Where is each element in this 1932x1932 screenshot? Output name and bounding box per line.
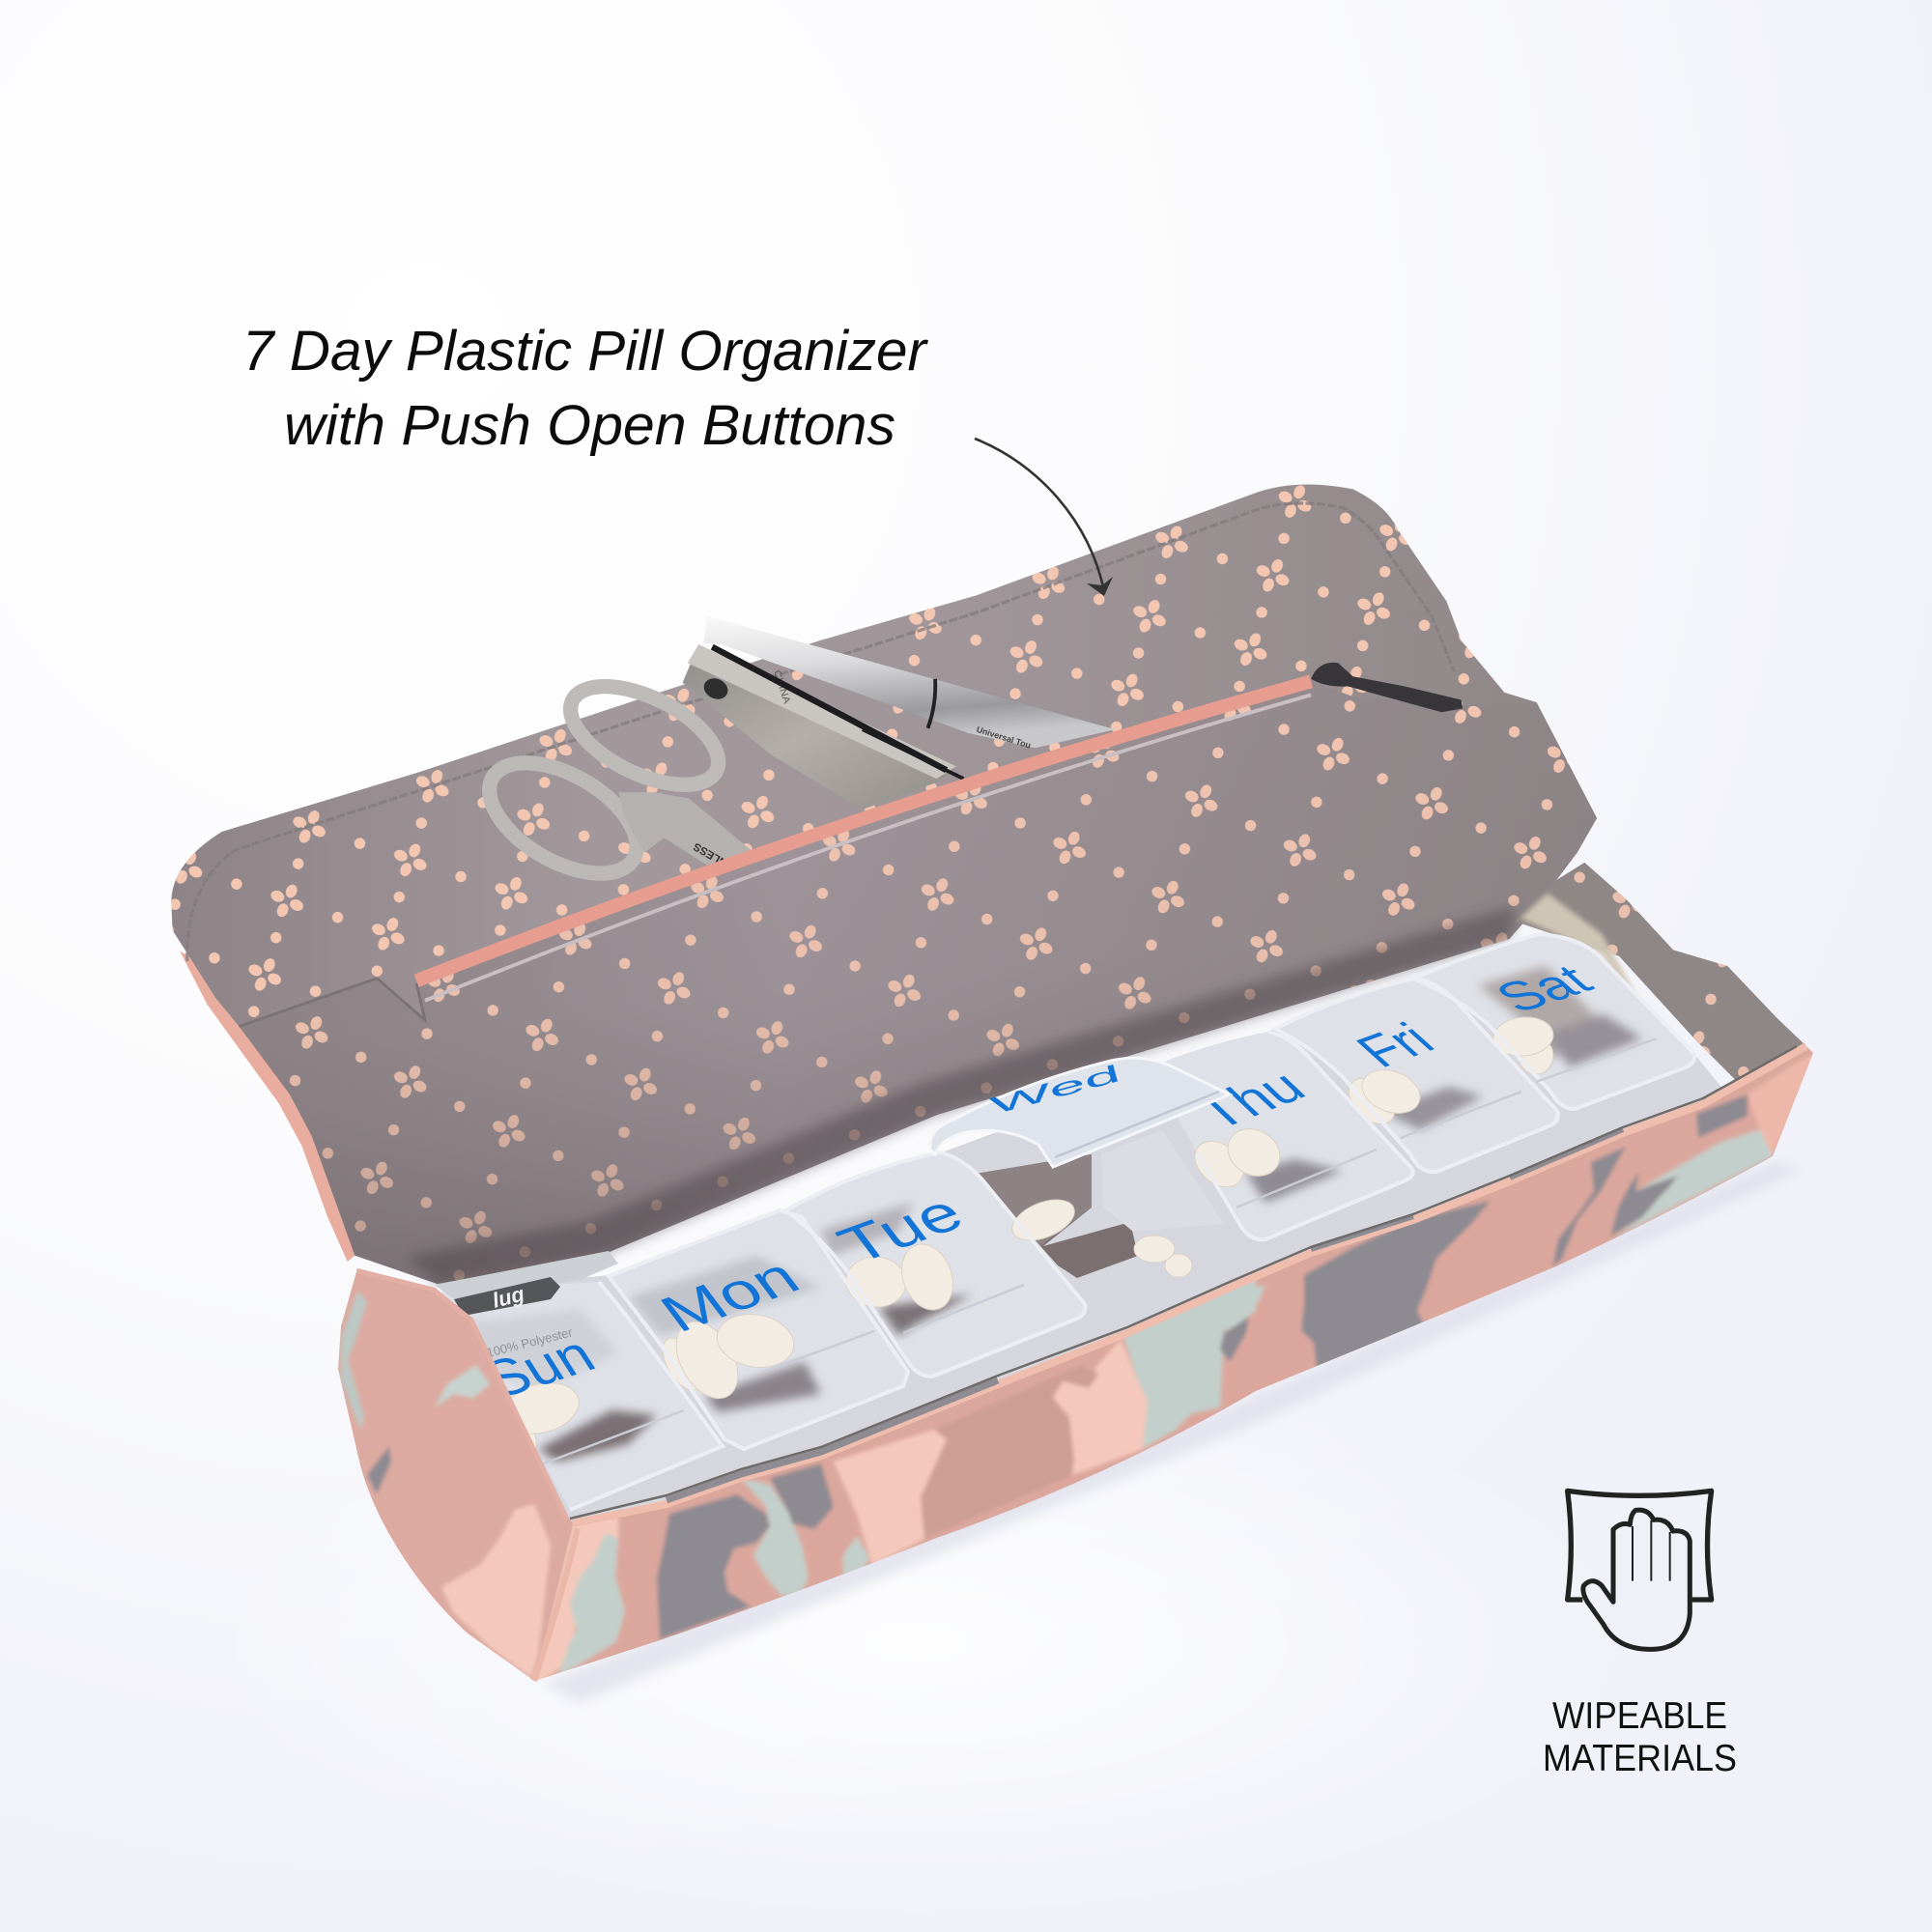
flap lining	[171, 484, 1597, 1109]
camo: grey top right	[1696, 1094, 1747, 1138]
camo: grey large	[1301, 1201, 1491, 1369]
front camo wall	[537, 1046, 1813, 1680]
scissors engraving: INLESS	[692, 839, 732, 870]
lid back: Tue	[785, 1152, 1085, 1377]
camo: pale 2	[741, 1478, 809, 1597]
lid interior shading	[467, 966, 1642, 1462]
camo: light pink	[441, 1504, 551, 1678]
pill tray	[441, 934, 1729, 1533]
paper tag with lug label	[435, 1251, 618, 1360]
cloth	[1568, 1491, 1712, 1600]
arrow	[975, 439, 1113, 596]
label: Sun: Sun	[472, 1325, 606, 1409]
camo: grey stripe	[1552, 1147, 1626, 1267]
camo: pale left of grey	[1254, 1284, 1265, 1304]
day labels	[472, 955, 1605, 1409]
camo: pale left	[341, 1292, 367, 1430]
label: Sat: Sat	[1483, 955, 1605, 1021]
case shadow	[542, 1161, 1802, 1703]
label: Fri: Fri	[1344, 1013, 1447, 1077]
dark crease above tray	[407, 905, 1516, 1284]
hand	[1583, 1510, 1690, 1649]
zipper	[416, 663, 1463, 1001]
camo: pink end	[1747, 1053, 1816, 1156]
camo: light pink 2	[1053, 1340, 1148, 1475]
camo: pale strip	[557, 1533, 625, 1678]
lids backing	[441, 934, 1694, 1510]
outer pink edge behind flap	[180, 952, 382, 1262]
caption line 1: WIPEABLE	[1552, 1695, 1727, 1737]
label: Tue: Tue	[827, 1184, 976, 1275]
scissor handles	[471, 667, 754, 896]
cream fold highlight	[1520, 894, 1651, 1023]
camo: pale dot	[843, 1536, 869, 1577]
label: Thu: Thu	[1182, 1060, 1318, 1139]
lid back: Sun	[441, 1282, 723, 1510]
camo: mauve	[921, 1365, 1098, 1539]
finger lines	[1633, 1520, 1670, 1581]
wall top binding	[570, 1046, 1806, 1523]
paper tag with lug label: lug	[490, 1281, 527, 1313]
lid back: Mon	[609, 1210, 908, 1449]
right end lining	[1516, 863, 1806, 1082]
icon caption	[1543, 1695, 1737, 1779]
open case lining and contents	[171, 484, 1806, 1703]
caption line 2: MATERIALS	[1543, 1738, 1737, 1779]
lid edges and front lips	[536, 934, 1694, 1510]
annotation text	[242, 320, 929, 457]
line 2: with Push Open Buttons	[284, 394, 895, 457]
open Wed lid	[930, 1058, 1230, 1167]
icon: hand wiping cloth	[1568, 1491, 1712, 1649]
label: Mon: Mon	[649, 1248, 811, 1344]
label: Wed: Wed	[987, 1060, 1123, 1120]
lid back: Fri	[1275, 979, 1558, 1172]
ridge seam	[357, 1268, 570, 1520]
zipper pull	[1311, 663, 1463, 712]
nail clipper	[683, 644, 963, 810]
line 1: 7 Day Plastic Pill Organizer	[242, 320, 929, 383]
corner seam	[534, 1528, 578, 1681]
tube print: Universal Tou	[976, 724, 1032, 751]
soft light patch below the case	[193, 1362, 1642, 1922]
camo: light pink corner	[534, 1512, 618, 1686]
printed insert text: 100% Polyester	[485, 1324, 575, 1360]
lid back: Sat	[1413, 934, 1694, 1109]
left end camo panel	[338, 1268, 573, 1681]
pocket seam notch	[239, 979, 425, 1026]
zip pocket lining	[239, 681, 1597, 1284]
camo: grey wedge	[1610, 1172, 1678, 1236]
camo: grey blob	[657, 1494, 770, 1639]
camo: pale green 3	[1123, 1277, 1256, 1449]
camo: grey upper	[770, 1463, 834, 1529]
camo: light pink strip	[834, 1430, 947, 1565]
camo: pale right	[1613, 1125, 1773, 1238]
pills	[497, 1014, 1555, 1462]
silver tube	[703, 616, 1115, 751]
camo: grey dab	[367, 1446, 391, 1494]
camo: grey spot	[1220, 1317, 1249, 1362]
open compartment: fabric through base	[976, 1154, 1138, 1278]
open compartment: frosted divider	[1101, 1130, 1224, 1232]
lid back: Thu	[1150, 1032, 1413, 1239]
clipper mark: CHINA	[771, 669, 792, 706]
camo: pale dab	[435, 1365, 490, 1407]
flap stitching	[187, 503, 1454, 961]
